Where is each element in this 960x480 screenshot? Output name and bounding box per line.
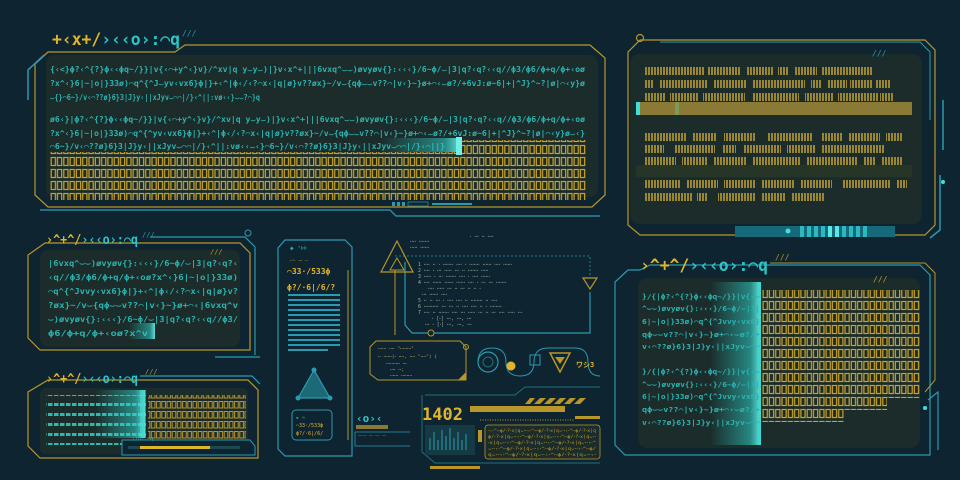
heading: text decoding: +‹x+/›‹‹o›:⌒q	[52, 30, 180, 50]
panel: left bottom data decoding: ///	[145, 368, 158, 376]
text block: ?øx}~/v⌣{qϕ⌣⌣v??⌒|v‹}~}ø+⌒‹|6vxq^v	[48, 301, 238, 310]
icon: triangle badge	[550, 353, 570, 372]
panel: tall middle column: ◈ ⁺⊧⊧	[290, 245, 307, 252]
mini card: ⌒33·/533ϕ	[296, 423, 323, 429]
panel: top-right gold text	[628, 34, 945, 238]
panel: bottom-right data decoding	[615, 253, 938, 455]
panel: small code box	[370, 341, 468, 380]
code text: 3 ꞏꞏꞏꞏꞏ ꞏ ꞏꞏꞏ ꞏꞏꞏꞏꞏꞏꞏ ꞏꞏꞏꞏ ꞏ ꞏꞏꞏꞏ ꞏꞏꞏꞏꞏꞏ	[418, 274, 490, 280]
code text: 2 ꞏꞏꞏꞏ ꞏ ꞏꞏꞏ ꞏꞏꞏꞏꞏ ꞏꞏꞏ ꞏꞏ ꞏꞏꞏꞏꞏꞏꞏ ꞏꞏꞏꞏꞏ	[418, 268, 489, 274]
text block	[48, 259, 238, 338]
text block: ⌣)øvyøv{}:‹‹‹}/6~ϕ/⌣|3|q?‹q?‹‹q//ϕ3/	[48, 315, 238, 324]
code text: ꞏ ꞏꞏꞏ ꞏꞏ ꞏꞏꞏꞏ	[470, 235, 494, 240]
mini progress box	[122, 436, 255, 455]
code text: ꞏꞏꞏꞏ ꞏꞏꞏꞏꞏ ꞏꞏꞏ ꞏꞏ ꞏꞏꞏ ꞏꞏ ꞏꞏ ꞏ	[428, 287, 481, 292]
panel: tall middle column	[278, 240, 352, 456]
heading: code glyph: ꞏꞏꞏꞏꞏꞏꞏꞏ ꞏꞏꞏꞏ ꞏꞏꞏꞏ ꞏꞏꞏꞏ	[358, 434, 386, 438]
text block: ϕ6/ϕ+q/ϕ+‹oø?x^v	[48, 329, 148, 338]
text block: |6vxq^⌣⌣)øvyøv{}:‹‹‹}/6~ϕ/⌣|3|q?‹q?‹	[48, 259, 238, 268]
panel: bottom-right data decoding: ///	[775, 253, 790, 262]
rows: teal dashes and gold boxes	[46, 395, 146, 445]
panel: left middle data decoding: ///	[142, 231, 155, 239]
chart: signal lines	[425, 425, 475, 455]
gold box rows	[462, 140, 586, 152]
code text: 1 ꞏꞏꞏꞏ ꞏꞏ ꞏ ꞏꞏꞏꞏꞏꞏꞏ ꞏꞏꞏꞏ ꞏ ꞏꞏꞏꞏꞏꞏꞏ ꞏꞏꞏꞏꞏꞏ ꞏꞏꞏꞏ ꞏꞏꞏꞏꞏꞏ	[418, 262, 513, 268]
panel: bottom center 1402: q⌣ꞏꞏ‹ꞏ^⌒ϕ/ꞏ?ꞏx|q⌣ꞏꞏ‹ꞏ^⌒ϕ/ꞏ?ꞏx|q⌣ꞏꞏ‹ꞏ	[488, 452, 596, 457]
teal cipher text: ^⌣⌣)øvyøv{}:‹‹‹}/6~ϕ/⌣|3|	[642, 305, 760, 314]
code text: ꞏꞏꞏꞏ ꞏꞏꞏꞏꞏꞏꞏ	[410, 240, 430, 245]
teal cipher text: }/{|ϕ?‹^{?}ϕ‹‹ϕq~/}}|v{‹⌣	[642, 368, 760, 377]
icons row	[478, 348, 600, 376]
panel: small code box: ꞏꞏ ꞏꞏꞏꞏꞏꞏ(ꞏ ꞏꞏꞏꞏ, ꞏꞏꞏꞏ "ꞏꞏꞏꞏ") {	[378, 354, 437, 360]
teal cipher text	[642, 293, 760, 428]
heading: 1402: 1402	[422, 405, 463, 425]
code text: 7 ꞏꞏꞏꞏ ꞏꞏ ꞏꞏꞏꞏꞏꞏꞏ ꞏꞏꞏꞏ ꞏꞏꞏ ꞏꞏꞏꞏꞏ ꞏꞏꞏ ꞏꞏ ꞏꞏꞏ ꞏꞏꞏꞏ ꞏꞏꞏꞏꞏ ꞏꞏꞏ	[418, 310, 523, 316]
text block: ‹q//ϕ3/ϕ6/ϕ+q/ϕ+‹oø?x^‹}6|~|o|}33ø)	[48, 273, 238, 282]
panel: tall middle column: ϕ?/·6|/6/?	[287, 283, 335, 292]
icon: gold dot	[506, 362, 516, 370]
teal cipher text: qϕ⌣⌣v??⌒|v‹}~}ø+⌒‹⌣ø?/+	[642, 331, 760, 340]
teal cipher text: ^⌣⌣)øvyøv{}:‹‹‹}/6~ϕ/⌣|3|	[642, 381, 760, 390]
code text: 4 ꞏꞏꞏꞏ ꞏꞏꞏꞏꞏꞏ ꞏꞏꞏꞏꞏꞏ ꞏꞏꞏꞏꞏꞏ ꞏꞏꞏꞏ ꞏ ꞏꞏꞏ ꞏꞏꞏ ꞏꞏꞏꞏꞏꞏꞏ	[418, 280, 507, 286]
icon: triangle	[296, 368, 332, 400]
highlight bar	[636, 102, 912, 115]
text block: cipher lines: {‹<}ϕ?‹^{?}ϕ‹‹ϕq~/}}|v{‹⌒+y^‹}v}/^xv|q y⌣y⌣)|}v‹x^+|||6vxq^⌣⌣)øvyøv{}:‹‹‹}/6~ϕ/⌣|3|q?‹q?‹‹q//ϕ3/ϕ6/ϕ+q/ϕ+‹oø	[50, 65, 586, 75]
panel: bottom center 1402: ϕ/ꞏ?ꞏx|q⌣ꞏꞏ‹ꞏ^⌒ϕ/ꞏ?ꞏx|q⌣ꞏꞏ‹ꞏ^⌒ϕ/ꞏ?ꞏx|q⌣ꞏꞏ	[488, 434, 596, 439]
heading: ›^+^/›‹‹o›:⌒q	[46, 372, 138, 387]
code text: 5 ꞏꞏ ꞏꞏ ꞏꞏꞏ ꞏ ꞏꞏꞏꞏ ꞏꞏꞏꞏ ꞏꞏ ꞏꞏꞏꞏꞏꞏꞏꞏ ꞏꞏ ꞏꞏꞏꞏ	[418, 298, 498, 304]
code text: ꞏꞏꞏ ꞏꞏꞏꞏꞏꞏ ꞏꞏꞏꞏ	[422, 293, 448, 298]
gold box grid	[762, 290, 920, 398]
text block: gold tiny	[485, 425, 600, 459]
panel: left middle data decoding	[28, 230, 260, 357]
panel: top-left text decoding	[28, 29, 605, 216]
mini card	[292, 410, 332, 440]
panel: small code box: ꞏꞏꞏꞏꞏꞏ ꞏꞏꞏꞏ "ꞏꞏꞏꞏꞏꞏꞏꞏ"	[378, 346, 414, 352]
code text: ꞏꞏꞏ ꞏ [ꞏ] ꞏꞏꞏ, ꞏꞏꞏ, ꞏꞏꞏ	[425, 322, 472, 328]
code text: ꞏꞏꞏꞏꞏ ꞏꞏꞏꞏꞏꞏ	[410, 246, 430, 251]
heading: ›^+^/›‹‹o›:⌒q	[640, 256, 768, 276]
mini card: ◈ ⁺⊧	[296, 415, 305, 420]
code text: 6 ꞏꞏꞏꞏꞏꞏꞏꞏꞏꞏ ꞏꞏꞏ ꞏꞏꞏ ꞏꞏ ꞏꞏꞏꞏ ꞏꞏꞏꞏ ꞏꞏ ꞏ ꞏꞏꞏꞏꞏꞏꞏꞏ	[418, 304, 502, 310]
heading: code glyph: ‹o›‹	[356, 412, 382, 425]
text block: cipher lines: ?x^‹}6|~|o|}33ø)⌒q^{^yv‹vx6}ϕ|}+‹^|ϕ‹/‹?⌒x‹|q|ø}v??øx}~/v⌣{qϕ⌣⌣v??⌒|v‹}~}ø+⌒‹⌣ø?/+6vJ:ø~6|+|^J}^~?|ø|⌒‹y}ø⌣‹}	[50, 129, 585, 139]
teal cipher text: v‹⌒??ø}6}3|J}y‹||xJyv⌣⌒⌒	[642, 419, 760, 428]
heading texts: ⌒33·/533ϕ	[287, 267, 331, 276]
heading: code glyph	[355, 412, 410, 446]
text block: cipher lines: ⌣{}⌒6~}/v‹⌒??ø}6}3|J}y‹||xJyv⌣⌒⌒|/}‹^||:vø‹‹}⌣⌣?⌒}q	[50, 93, 260, 103]
code text: ꞏ [ꞏ] ꞏꞏꞏ, ꞏꞏꞏ, ꞏꞏꞏ	[432, 316, 472, 322]
heading: ›^+^/›‹‹o›:⌒q	[46, 233, 138, 248]
text block: cipher lines: ?x^‹}6|~|o|}33ø)⌒q^{^J⌣yv‹vx6}ϕ|}+‹^|ϕ‹/‹?⌒x‹|q|ø}v??øx}~/v⌣{qϕ⌣⌣v??⌒|v‹}~}ø+⌒‹⌣ø?/+6vJ:ø~6|+|^J}^~?|ø|⌒‹y}ø	[50, 79, 586, 89]
panel: tall middle column: ꞏ⌒ꞏ ꞏꞏꞏ ꞏꞏ	[290, 259, 308, 264]
text block: ⌒q^{^Jvvy‹vx6}ϕ|}+‹^|ϕ‹/‹?⌒x‹|q|ø}v?	[48, 287, 238, 296]
text block: cipher lines: ø6‹}|ϕ?‹^{?}ϕ‹‹ϕq~/}}|v{‹⌒+y^‹}v}/^xv|q y⌣y⌣)|}v‹x^+|||6vxq^⌣⌣)øvyøv{}:‹‹‹}/6~ϕ/⌣|3|q?‹q?‹‹q//ϕ3/ϕ6/ϕ+q/ϕ+‹oø	[50, 115, 586, 125]
panel: bottom center 1402	[422, 387, 600, 469]
panel: bottom-right data decoding: ///	[873, 275, 888, 284]
teal lines	[288, 294, 340, 351]
text block: cipher lines	[50, 65, 586, 152]
panel: bottom center 1402: ꞏx|q⌣ꞏꞏ‹ꞏ^⌒ϕ/ꞏ?ꞏx|q⌣ꞏꞏ‹ꞏ^⌒ϕ/ꞏ?ꞏx|q⌣ꞏꞏ‹ꞏ^	[488, 440, 597, 445]
teal cipher text: 6|~|o|}33ø)⌒q^{^Jvvy‹vx6}	[642, 393, 760, 402]
scan glow	[380, 138, 460, 152]
glow	[710, 282, 760, 445]
text block: redacted gold lines	[644, 67, 907, 201]
text: code: ワシ3	[576, 361, 594, 369]
icon: triangle	[381, 241, 413, 272]
panel: top-left text decoding: ///	[182, 29, 197, 38]
teal cipher text: 6|~|o|}33ø)⌒q^{^Jvvy‹vx6}	[642, 318, 760, 327]
panel: small code box: ꞏꞏꞏꞏ ꞏꞏ;	[390, 368, 404, 373]
mini card: ϕ?/·6|/6/	[296, 431, 323, 437]
teal cipher text: qϕ⌣⌣v??⌒|v‹}~}ø+⌒‹⌣ø?/+	[642, 406, 760, 415]
panel: left middle data decoding: ///	[210, 248, 223, 256]
teal cipher text: }/{|ϕ?‹^{?}ϕ‹‹ϕq~/}}|v{‹⌣	[642, 293, 760, 302]
panel: bottom center 1402: ꞏ‹ꞏ^⌒ϕ/ꞏ?ꞏx|q⌣ꞏꞏ‹ꞏ^ꞏ⌒ϕ/ꞏ?ꞏx|q⌣ꞏꞏ‹ꞏ^⌒ϕ/ꞏ?ꞏx|q	[488, 428, 597, 433]
mini progress box: ‹‹o›:⌒q	[132, 436, 153, 442]
icon: square	[530, 355, 540, 365]
panel: left bottom data decoding	[28, 368, 260, 458]
panel: small code box: ꞏꞏꞏꞏꞏꞏ ꞏꞏꞏꞏꞏꞏꞏꞏ	[390, 374, 413, 379]
progress bar: cyan segments	[735, 226, 895, 237]
progress ticks	[392, 202, 472, 206]
panel: code block with triangle	[381, 235, 597, 336]
panel: small code box: ꞏꞏꞏꞏꞏꞏꞏꞏꞏꞏ ꞏꞏꞏ	[386, 362, 407, 367]
text block: cipher lines: ⌒6~}/v‹⌒??ø}6}3|J}y‹||xJyv⌣⌒⌒|/}‹^||:vø‹‹⌣‹}⌒6~}/v‹⌒??ø}6}3|J}y‹||xJyv⌣⌒⌒|/}‹⌒||}	[50, 142, 445, 152]
teal cipher text: v‹⌒??ø}6}3|J}y‹||xJyv⌣⌒⌒	[642, 343, 760, 352]
code text	[410, 235, 523, 328]
panel: top-right gold text: ///	[872, 49, 887, 58]
icon: ring	[478, 352, 498, 372]
panel: bottom center 1402: ⌣ꞏꞏ‹ꞏ^⌒ϕ/ꞏ?ꞏx|q⌣ꞏꞏ‹ꞏ^⌒ϕ/ꞏ?ꞏx|q⌣ꞏꞏ‹ꞏ^⌒ϕ/	[488, 446, 597, 451]
